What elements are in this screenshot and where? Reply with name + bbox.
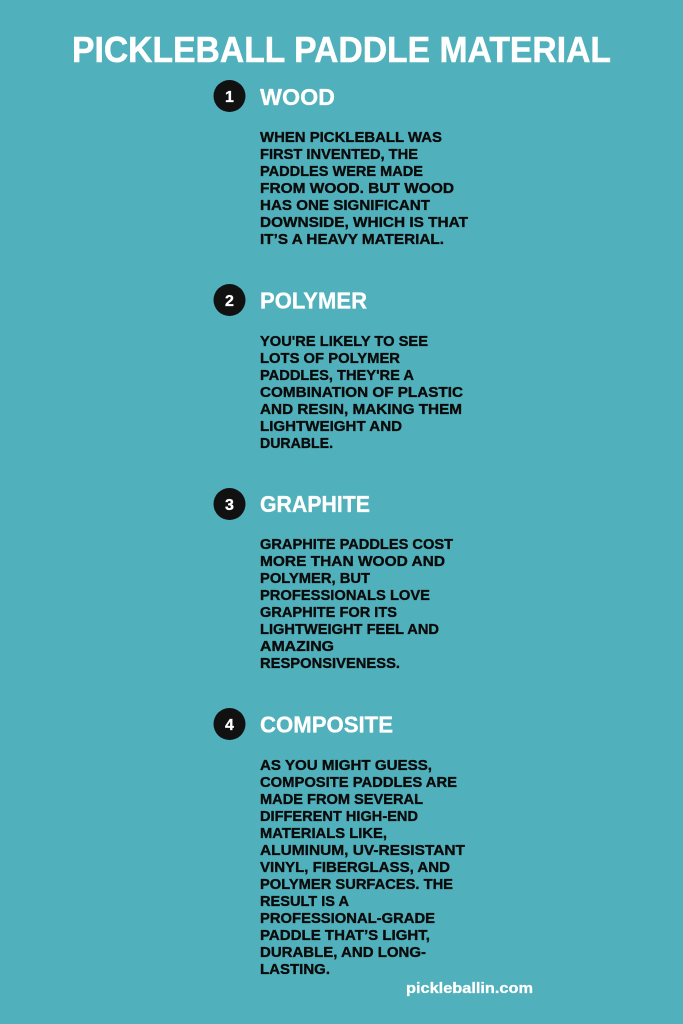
text block: polymer description: AND RESIN, MAKING THEM xyxy=(260,402,462,418)
text block: composite description: RESULT IS A xyxy=(260,894,350,910)
text block: wood description: FROM WOOD. BUT WOOD xyxy=(260,181,454,197)
footer: website: pickleballin.com xyxy=(406,980,533,997)
heading: graphite: GRAPHITE xyxy=(260,491,370,517)
icon: number 1 badge: 1 xyxy=(225,89,234,106)
icon: number 4 badge xyxy=(214,708,246,740)
icon: number 3 badge xyxy=(214,488,246,520)
text block: polymer description: LIGHTWEIGHT AND xyxy=(260,419,402,435)
text block: composite description: PADDLE THAT’S LIGHT, xyxy=(260,928,430,944)
text block: composite description: AS YOU MIGHT GUESS, xyxy=(260,758,432,774)
text block: graphite description: POLYMER, BUT xyxy=(260,571,370,587)
text block: composite description: MATERIALS LIKE, xyxy=(260,826,387,842)
title: PICKLEBALL PADDLE MATERIAL xyxy=(72,29,611,70)
text block: polymer description: COMBINATION OF PLASTIC xyxy=(260,385,464,401)
text block: composite description: MADE FROM SEVERAL xyxy=(260,792,423,808)
icon: number 2 badge xyxy=(214,284,246,316)
text block: composite description: LASTING. xyxy=(260,962,330,978)
text block: graphite description: GRAPHITE FOR ITS xyxy=(260,605,397,621)
text block: graphite description: GRAPHITE PADDLES COST xyxy=(260,537,453,553)
text block: wood description: PADDLES WERE MADE xyxy=(260,164,423,180)
text block: graphite description: PROFESSIONALS LOVE xyxy=(260,588,430,604)
text block: graphite description xyxy=(260,537,453,672)
text block: composite description: DIFFERENT HIGH-END xyxy=(260,809,418,825)
icon: number 3 badge: 3 xyxy=(225,497,234,514)
text block: graphite description: RESPONSIVENESS. xyxy=(260,656,400,672)
text block: composite description: POLYMER SURFACES. THE xyxy=(260,877,453,893)
text block: wood description xyxy=(260,130,468,248)
text block: graphite description: AMAZING xyxy=(260,639,334,655)
panel: polymer xyxy=(214,284,464,452)
panel: graphite xyxy=(214,488,453,672)
text block: wood description: WHEN PICKLEBALL WAS xyxy=(260,130,442,146)
text block: composite description xyxy=(260,758,465,978)
heading: composite: COMPOSITE xyxy=(260,712,393,738)
text block: wood description: HAS ONE SIGNIFICANT xyxy=(260,198,430,214)
text block: polymer description: DURABLE. xyxy=(260,436,333,452)
heading: wood: WOOD xyxy=(260,84,335,110)
icon: number 2 badge: 2 xyxy=(225,293,234,310)
text block: wood description: FIRST INVENTED, THE xyxy=(260,147,418,163)
icon: number 1 badge xyxy=(214,80,246,112)
text block: composite description: VINYL, FIBERGLASS, AND xyxy=(260,860,450,876)
text block: composite description: PROFESSIONAL-GRADE xyxy=(260,911,435,927)
panel: wood xyxy=(214,80,468,248)
panel: composite xyxy=(214,708,465,978)
text block: wood description: IT’S A HEAVY MATERIAL. xyxy=(260,232,444,248)
text block: polymer description: YOU'RE LIKELY TO SEE xyxy=(260,334,428,350)
heading: polymer: POLYMER xyxy=(260,288,367,314)
text block: graphite description: LIGHTWEIGHT FEEL AND xyxy=(260,622,439,638)
text block: composite description: DURABLE, AND LONG- xyxy=(260,945,426,961)
text block: polymer description: LOTS OF POLYMER xyxy=(260,351,401,367)
text block: wood description: DOWNSIDE, WHICH IS THAT xyxy=(260,215,468,231)
text block: composite description: COMPOSITE PADDLES ARE xyxy=(260,775,457,791)
text block: composite description: ALUMINUM, UV-RESISTANT xyxy=(260,843,465,859)
icon: number 4 badge: 4 xyxy=(225,717,234,734)
text block: polymer description xyxy=(260,334,464,452)
text block: graphite description: MORE THAN WOOD AND xyxy=(260,554,445,570)
text block: polymer description: PADDLES, THEY'RE A xyxy=(260,368,415,384)
